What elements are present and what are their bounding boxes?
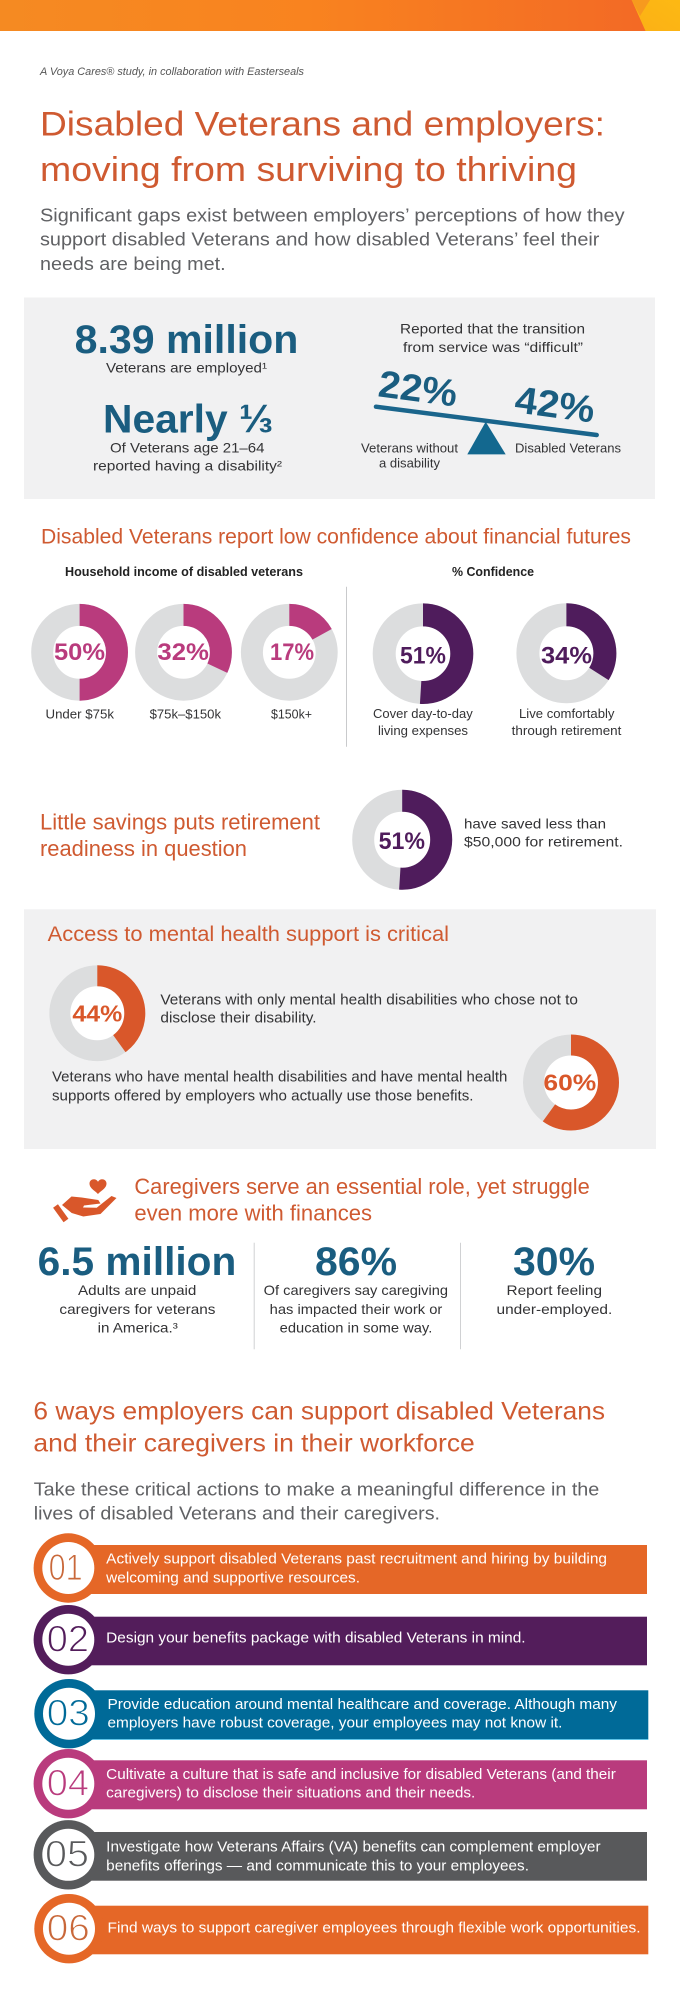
donut: 51% day-to-day expenses: 51% (400, 642, 446, 669)
text: chose not to disclose (160, 992, 578, 1027)
stat: 86% of caregivers: has impacted their work or (270, 1301, 443, 1317)
donut: 17% $150k+: $150k+ (271, 706, 312, 721)
action 03: Provide education around mental healthcare and coverage. Although many (108, 1697, 618, 1713)
donut: 17% $150k+: 17% (270, 639, 314, 666)
intro: critical actions: lives of disabled Veterans and their caregivers. (34, 1503, 440, 1523)
donut: 50% under $75k (31, 604, 128, 721)
action 04: Cultivate a culture that is safe and inclusive for disabled Veterans (and their (106, 1767, 616, 1783)
seesaw chart: Disabled Veterans (515, 441, 621, 456)
stat: 30% under-employed: Report feeling (506, 1282, 602, 1298)
action 05 (34, 1820, 647, 1890)
heading: caregivers (134, 1174, 590, 1226)
donut: 34% retirement comfort: through retirement (512, 723, 622, 738)
stat: 6.5 million caregivers: in America.³ (98, 1319, 178, 1335)
donut: 34% retirement comfort: Live comfortably (519, 706, 615, 721)
subheading: household income: Household income of disabled veterans (65, 565, 303, 579)
action 01: welcoming and supportive resources. (105, 1570, 360, 1586)
transition heading: from service was “difficult” (403, 339, 583, 355)
intro paragraph: support disabled Veterans and how disabled Veterans’ feel their (40, 230, 599, 250)
stat: 8.39 million: Veterans are employed¹ (106, 359, 267, 375)
text: use those benefits (52, 1070, 507, 1105)
donut: 34% retirement comfort (512, 603, 622, 738)
panel: mental health support (24, 909, 656, 1149)
text: use those benefits: Veterans who have mental health disabilities and have mental health (52, 1070, 507, 1086)
savings statement (464, 815, 623, 850)
intro: critical actions (34, 1480, 599, 1523)
action 04: caregivers) to disclose their situations and their needs. (106, 1785, 475, 1801)
donut: 60% use benefits (523, 1034, 619, 1130)
action 05: benefits offerings — and communicate this to your employees. (106, 1859, 529, 1875)
stat: 30% under-employed: under-employed. (496, 1301, 612, 1317)
action 06: Find ways to support caregiver employees through flexible work opportunities. (108, 1920, 640, 1936)
heading: six ways (33, 1397, 605, 1458)
seesaw chart (361, 364, 621, 471)
heading: caregivers: even more with finances (134, 1201, 372, 1226)
action 06 (34, 1894, 648, 1963)
text: chose not to disclose: Veterans with only mental health disabilities who chose not to (160, 992, 578, 1008)
intro paragraph (40, 206, 625, 274)
donut: 50% under $75k: 50% (54, 639, 105, 666)
transition heading: Reported that the transition (400, 320, 585, 336)
stat: 86% of caregivers: 86% (315, 1240, 397, 1284)
action 01 (34, 1533, 647, 1603)
heading: mental health: Access to mental health support is critical (48, 922, 449, 946)
action 03: employers have robust coverage, your employees may not know it. (108, 1716, 562, 1732)
action 05: 05 (45, 1834, 89, 1875)
panel: veteran statistics (24, 298, 655, 499)
donut: 32% $75k-$150k: 32% (157, 639, 209, 666)
stat: 6.5 million caregivers: 6.5 million (38, 1240, 236, 1284)
action 02: Design your benefits package with disabled Veterans in mind. (106, 1631, 526, 1647)
icon: hand holding heart (56, 1179, 116, 1220)
seesaw chart: Veterans without (361, 440, 458, 455)
stat: 86% of caregivers: Of caregivers say caregiving (264, 1282, 448, 1298)
study attribution: A Voya Cares® study, in collaboration with Easterseals (39, 66, 304, 78)
donut: 50% under $75k: Under $75k (46, 706, 114, 721)
text: use those benefits: supports offered by employers who actually use those benefits. (52, 1089, 474, 1105)
heading: caregivers: Caregivers serve an essential role, yet struggle (134, 1174, 590, 1199)
action 02 (34, 1605, 647, 1674)
stat: 8.39 million: 8.39 million (75, 318, 298, 362)
donut: 32% $75k-$150k: $75k–$150k (150, 706, 222, 721)
heading: low confidence: Disabled Veterans report low confidence about financial futures (41, 525, 631, 548)
stat: nearly one third: reported having a disability² (93, 457, 282, 473)
subheading: confidence: % Confidence (452, 565, 534, 579)
action 01: 01 (49, 1547, 83, 1588)
savings statement: have saved less than (464, 815, 606, 831)
donut: 51% saved less than $50,000: 51% (379, 828, 425, 855)
intro paragraph: needs are being met. (40, 254, 226, 274)
action 02: 02 (47, 1618, 89, 1660)
seesaw chart: 22% (376, 364, 460, 415)
action 04 (34, 1749, 647, 1818)
donut: 51% day-to-day expenses: Cover day-to-day (373, 706, 473, 721)
donut: 51% saved less than $50,000 (352, 790, 452, 890)
intro: critical actions: Take these critical actions to make a meaningful difference in the (34, 1480, 599, 1500)
transition heading (400, 320, 585, 355)
seesaw chart: 42% (512, 379, 597, 432)
donut: 32% $75k-$150k (135, 604, 232, 721)
stat: 86% of caregivers (264, 1240, 448, 1335)
donut: 44% did not disclose: 44% (72, 1001, 122, 1027)
seesaw chart: a disability (379, 456, 440, 471)
action 03: 03 (47, 1692, 90, 1734)
title (40, 106, 605, 189)
heading: little savings (40, 809, 320, 861)
action 04: 04 (47, 1762, 89, 1804)
stat: nearly one third: Nearly ⅓ (103, 398, 273, 442)
heading: six ways: 6 ways employers can support disabled Veterans (33, 1397, 605, 1425)
stat: 6.5 million caregivers: Adults are unpaid (78, 1282, 196, 1298)
stat: 86% of caregivers: education in some way. (280, 1319, 432, 1335)
stat: nearly one third (93, 398, 282, 473)
title: Disabled Veterans and employers: (40, 106, 605, 144)
donut: 44% did not disclose (49, 965, 145, 1061)
heading: six ways: and their caregivers in their workforce (33, 1430, 475, 1458)
stat: 6.5 million caregivers (38, 1240, 236, 1335)
donut: 51% day-to-day expenses (373, 603, 473, 738)
donut: 34% retirement comfort: 34% (541, 642, 592, 669)
stat: 30% under-employed: 30% (513, 1240, 595, 1284)
donut: 51% day-to-day expenses: living expenses (378, 723, 469, 738)
intro paragraph: Significant gaps exist between employers’ perceptions of how they (40, 206, 625, 226)
stat: 30% under-employed (496, 1240, 612, 1317)
title: moving from surviving to thriving (40, 151, 577, 189)
action 05: Investigate how Veterans Affairs (VA) benefits can complement employer (106, 1840, 601, 1856)
donut: 60% use benefits: 60% (543, 1070, 596, 1096)
text: chose not to disclose: disclose their disability. (160, 1011, 317, 1027)
heading: little savings: readiness in question (40, 836, 247, 861)
action 06: 06 (47, 1908, 90, 1949)
stat: nearly one third: Of Veterans age 21–64 (110, 439, 265, 455)
action 01: Actively support disabled Veterans past recruitment and hiring by building (106, 1551, 607, 1567)
heading: little savings: Little savings puts retirement (40, 809, 320, 834)
stat: 6.5 million caregivers: caregivers for veterans (59, 1301, 216, 1317)
action 03 (34, 1679, 648, 1748)
donut: 17% $150k+ (241, 604, 338, 721)
savings statement: $50,000 for retirement. (464, 834, 623, 850)
top banner (0, 0, 680, 31)
